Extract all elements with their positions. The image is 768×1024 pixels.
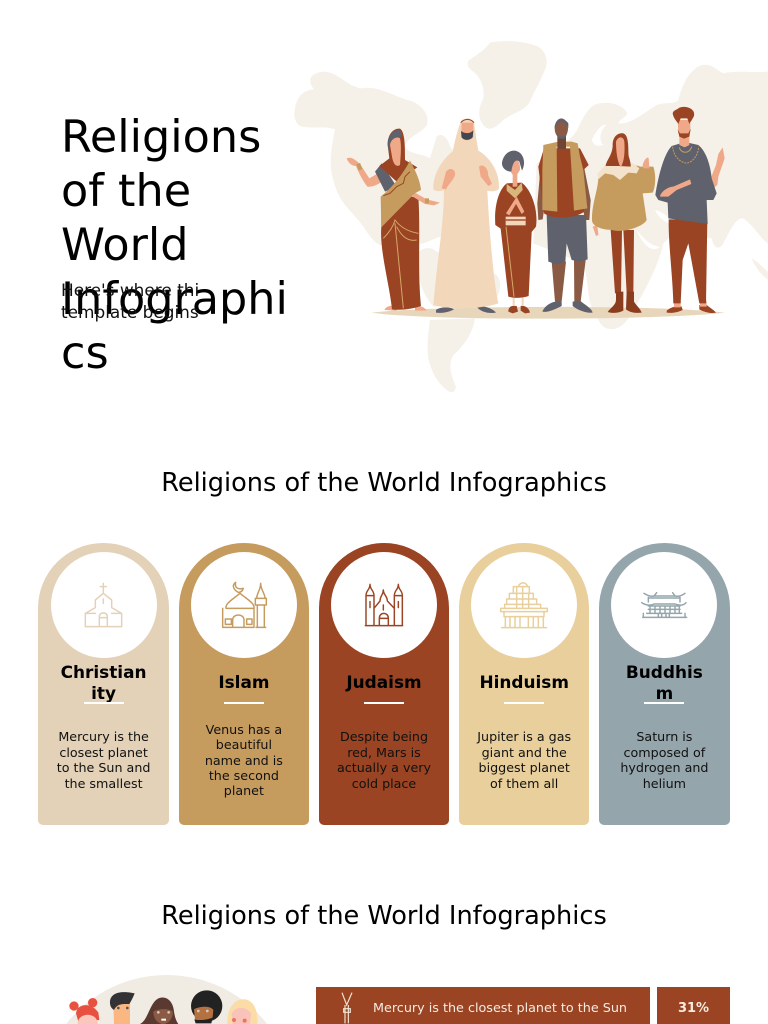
main title: cs <box>61 328 109 379</box>
card: Islam <box>179 543 309 825</box>
value box: 31% <box>657 987 730 1024</box>
card: Hinduism: biggest planet <box>479 760 570 775</box>
card: Christianity: closest planet <box>59 745 148 760</box>
card: Judaism: actually a very <box>337 760 431 775</box>
card: Christianity: to the Sun and <box>57 760 150 775</box>
card: Christianity: the smallest <box>65 776 143 791</box>
card: Islam: Venus has a <box>206 722 282 737</box>
card: Islam: Islam <box>218 672 269 692</box>
main title: World <box>61 220 189 271</box>
card: Judaism: Despite being <box>340 729 428 744</box>
backdrop circle <box>66 975 267 1024</box>
card: Judaism: Judaism <box>346 672 422 692</box>
face: man with afro <box>191 990 222 1023</box>
person: man in grey shirt <box>655 107 725 313</box>
icon: synagogue <box>364 584 404 626</box>
person: woman in fur coat <box>592 133 655 313</box>
card: Judaism: red, Mars is <box>347 745 421 760</box>
section heading 2: Religions of the World Infographics <box>161 901 607 931</box>
card: Christianity: Mercury is the <box>58 729 149 744</box>
face: man with dark hair <box>110 992 135 1024</box>
card: Islam: the second <box>209 768 279 783</box>
world map <box>294 41 768 392</box>
main title <box>61 112 288 379</box>
icon: church <box>84 582 122 628</box>
card: Hinduism: giant and the <box>482 745 567 760</box>
icon: pagoda <box>640 592 688 618</box>
card: Judaism <box>319 543 449 825</box>
card: Buddhism: m <box>656 683 673 703</box>
card: Christianity: Christian <box>61 662 147 682</box>
card: Islam: name and is <box>205 753 283 768</box>
icon: mosque <box>222 582 268 628</box>
person: man in white robe <box>433 118 499 313</box>
main title: Infographi <box>61 274 288 325</box>
icon: hindu temple <box>500 582 548 628</box>
white map gaps <box>592 125 768 263</box>
card: Buddhism <box>599 543 730 825</box>
main title: of the <box>61 166 191 217</box>
person: woman in kimono <box>495 151 536 313</box>
subtitle: template begins <box>61 302 199 322</box>
person: woman in sari <box>347 129 440 311</box>
illustration: people in front of a world map <box>294 41 768 392</box>
card: Islam: beautiful <box>216 737 272 752</box>
face: redhead <box>69 998 99 1024</box>
card: Islam: planet <box>224 783 264 798</box>
bar: Mercury row <box>316 987 650 1024</box>
card: Hinduism <box>459 543 589 825</box>
illustration: group of faces <box>66 975 267 1024</box>
card: Judaism: cold place <box>352 776 416 791</box>
card: Christianity: ity <box>91 683 116 703</box>
section heading 1: Religions of the World Infographics <box>161 468 607 498</box>
card: Hinduism: Hinduism <box>479 672 569 692</box>
face: woman with brown hair <box>140 997 178 1024</box>
card: Buddhism: Saturn is <box>636 729 692 744</box>
icon: rope knot <box>342 992 352 1024</box>
card: Buddhism: hydrogen and <box>620 760 708 775</box>
ground shadow <box>372 307 725 319</box>
face: blonde woman <box>227 999 258 1024</box>
card: Christianity <box>38 543 169 825</box>
value text: 31% <box>678 1001 709 1016</box>
bar text: Mercury is the closest planet to the Sun <box>373 1001 627 1016</box>
subtitle: Here's where thi <box>61 280 199 300</box>
card: Buddhism: Buddhis <box>626 662 703 682</box>
main title: Religions <box>61 112 261 163</box>
card: Hinduism: Jupiter is a gas <box>477 729 571 744</box>
card: Buddhism: composed of <box>624 745 705 760</box>
subtitle <box>61 280 199 322</box>
card: Hinduism: of them all <box>490 776 558 791</box>
card: Buddhism: helium <box>643 776 686 791</box>
person: man with vest and shorts <box>537 118 593 313</box>
